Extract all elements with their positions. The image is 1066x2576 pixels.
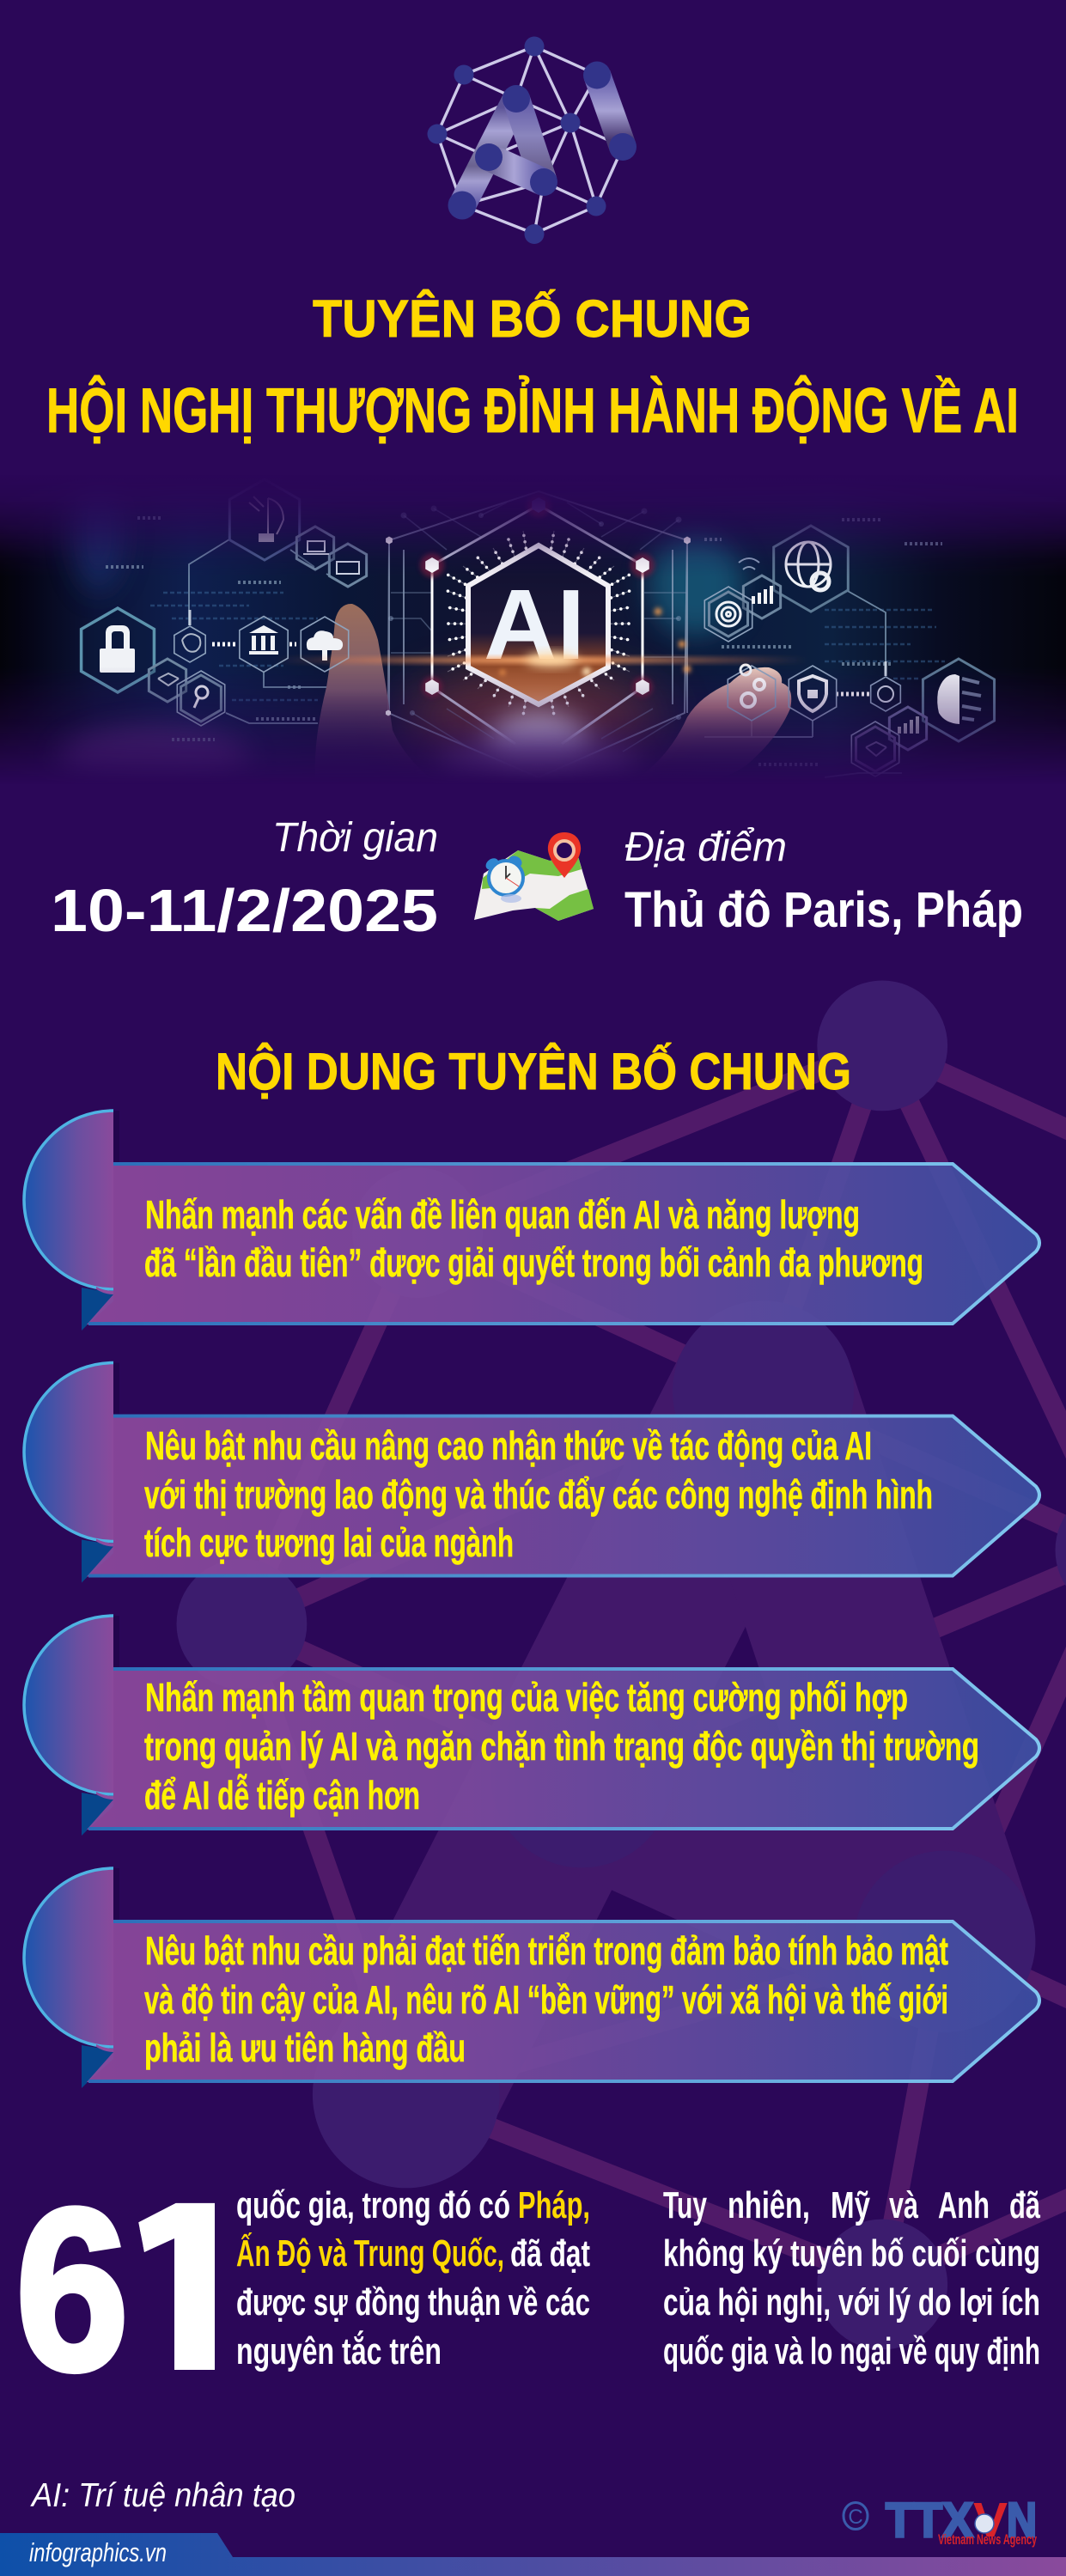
place label: Địa điểm: [624, 825, 787, 870]
small hexagon icons: [82, 608, 154, 692]
text block: US and UK: và: [889, 2184, 918, 2226]
place value: Thủ đô Paris, Pháp: [624, 882, 1023, 938]
text block: US and UK: nhiên,: [728, 2184, 810, 2226]
dotted circuit rays: [448, 531, 630, 716]
title line 1: TUYÊN BỐ CHUNG: [313, 289, 752, 348]
big number 61: [21, 2202, 215, 2374]
footer bar: infographics.vn: [29, 2537, 167, 2567]
background network pattern: [176, 981, 1066, 2349]
faint circuit traces: [391, 502, 687, 752]
footnote: AI: Trí tuệ nhân tạo: [30, 2477, 295, 2514]
circuit hexagon frames: [388, 491, 687, 777]
text block: 61 countries: được sự đồng thuận về các: [236, 2281, 590, 2323]
faint data streaks: [150, 593, 945, 700]
panel: statement 2: [24, 1362, 1041, 1582]
logo: AI network: [428, 36, 637, 244]
text block: 61 countries: nguyên tắc trên: [236, 2329, 442, 2372]
AI letters: AI: [484, 569, 585, 680]
dashed labels: [106, 518, 942, 764]
TTXVN logo: [844, 2493, 1037, 2548]
text block: 61 countries: quốc gia, trong đó có: [236, 2184, 510, 2226]
text block: US and UK: Tuy: [663, 2184, 707, 2226]
big number 61: 1: [107, 2159, 271, 2420]
text block: US and UK: đã: [1009, 2184, 1040, 2226]
TTXVN logo: N: [1007, 2493, 1037, 2548]
panel: statement 2: tích cực tương lai của ngành: [144, 1520, 514, 1565]
text block: 61 countries: Ấn Độ và Trung Quốc,: [236, 2232, 504, 2275]
panel: statement 3: để AI dễ tiếp cận hơn: [144, 1773, 420, 1818]
hero image: AI hexagon and hands: [0, 494, 1066, 777]
date: 10-11/2/2025: [51, 877, 438, 944]
text block: 61 countries: [236, 2184, 590, 2372]
footer bar: [0, 2533, 1066, 2576]
corner nodes: [420, 493, 655, 697]
panel: statement 3: [24, 1616, 1041, 1836]
big number 61: 6: [15, 2160, 129, 2418]
text block: 61 countries: đã đạt: [510, 2232, 590, 2275]
text block: US and UK: Anh: [938, 2184, 990, 2226]
panel: statement 1: [24, 1111, 1041, 1331]
connector lines: [189, 539, 902, 777]
AI core hexagon: [471, 554, 606, 701]
panel: statement 4: phải là ưu tiên hàng đầu: [144, 2025, 466, 2070]
TTXVN logo: V: [973, 2493, 1008, 2548]
hands: [316, 604, 403, 754]
section heading: NỘI DUNG TUYÊN BỐ CHUNG: [216, 1043, 851, 1100]
TTXVN logo: TTX: [886, 2493, 973, 2548]
text block: US and UK: Mỹ: [831, 2184, 870, 2226]
text block: US and UK: [663, 2184, 1040, 2372]
time label: Thời gian: [272, 815, 438, 861]
icon: map, pin and clock: [474, 832, 594, 921]
text block: 61 countries: Pháp,: [518, 2184, 590, 2226]
TTXVN logo: C: [848, 2506, 863, 2529]
icon glyphs in hexagons: [100, 586, 959, 734]
panel: statement 4: [24, 1868, 1041, 2088]
